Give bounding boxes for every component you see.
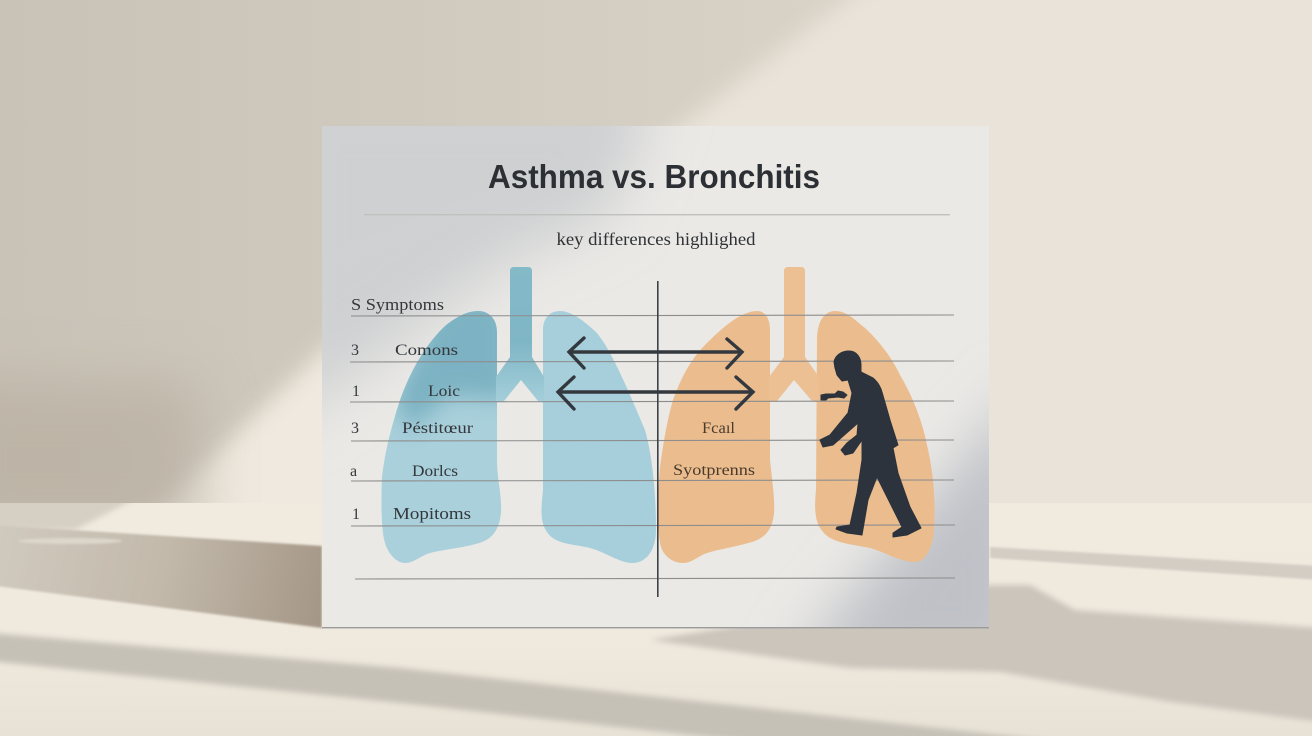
row 3: 3 [351,420,359,437]
row 2: 1 [352,383,360,400]
row 3 [351,420,474,437]
title divider [364,214,950,215]
background: wall with light beams [0,0,845,503]
row 1 [351,342,458,359]
cough particles / inhaler [821,391,847,400]
centre divider [657,281,659,597]
lungs: asthma (blue) [381,267,656,563]
panel: comparison card [322,126,989,628]
trachea and bronchi [496,267,544,403]
header label: S Symptoms [351,295,444,314]
row 4: a [350,463,357,480]
label: Fcaıl: Fcaıl [702,420,736,437]
row 3: Péstitœur [402,420,474,437]
right column labels [673,420,755,479]
left lobe [658,311,774,563]
right lobe [815,311,935,562]
row 2 [352,383,460,400]
background: floor with cast shadows [0,496,1312,736]
row 1: 3 [351,342,359,359]
arrow: lower double-headed [558,377,753,409]
row 4 [350,463,458,480]
subtitle: key differences highlighed [556,229,756,249]
upper left shading [394,311,497,432]
row 5: Mopitoms [393,504,471,523]
left column labels [350,295,474,523]
title: Asthma vs. Bronchitis [488,158,820,195]
row 1: Comons [395,342,458,359]
left lobe [381,311,501,563]
row 5 [352,504,471,523]
row 4: Dorlcs [412,463,458,480]
right lobe [542,311,656,563]
trachea and bronchi [769,267,819,403]
label: Syotprenns: Syotprenns [673,462,755,479]
icon: coughing person silhouette [820,351,921,537]
lungs: bronchitis (orange) [658,267,935,563]
row 5: 1 [352,506,360,523]
arrow: upper double-headed [569,338,742,368]
table rules [350,315,955,579]
row 2: Loic [428,383,460,400]
